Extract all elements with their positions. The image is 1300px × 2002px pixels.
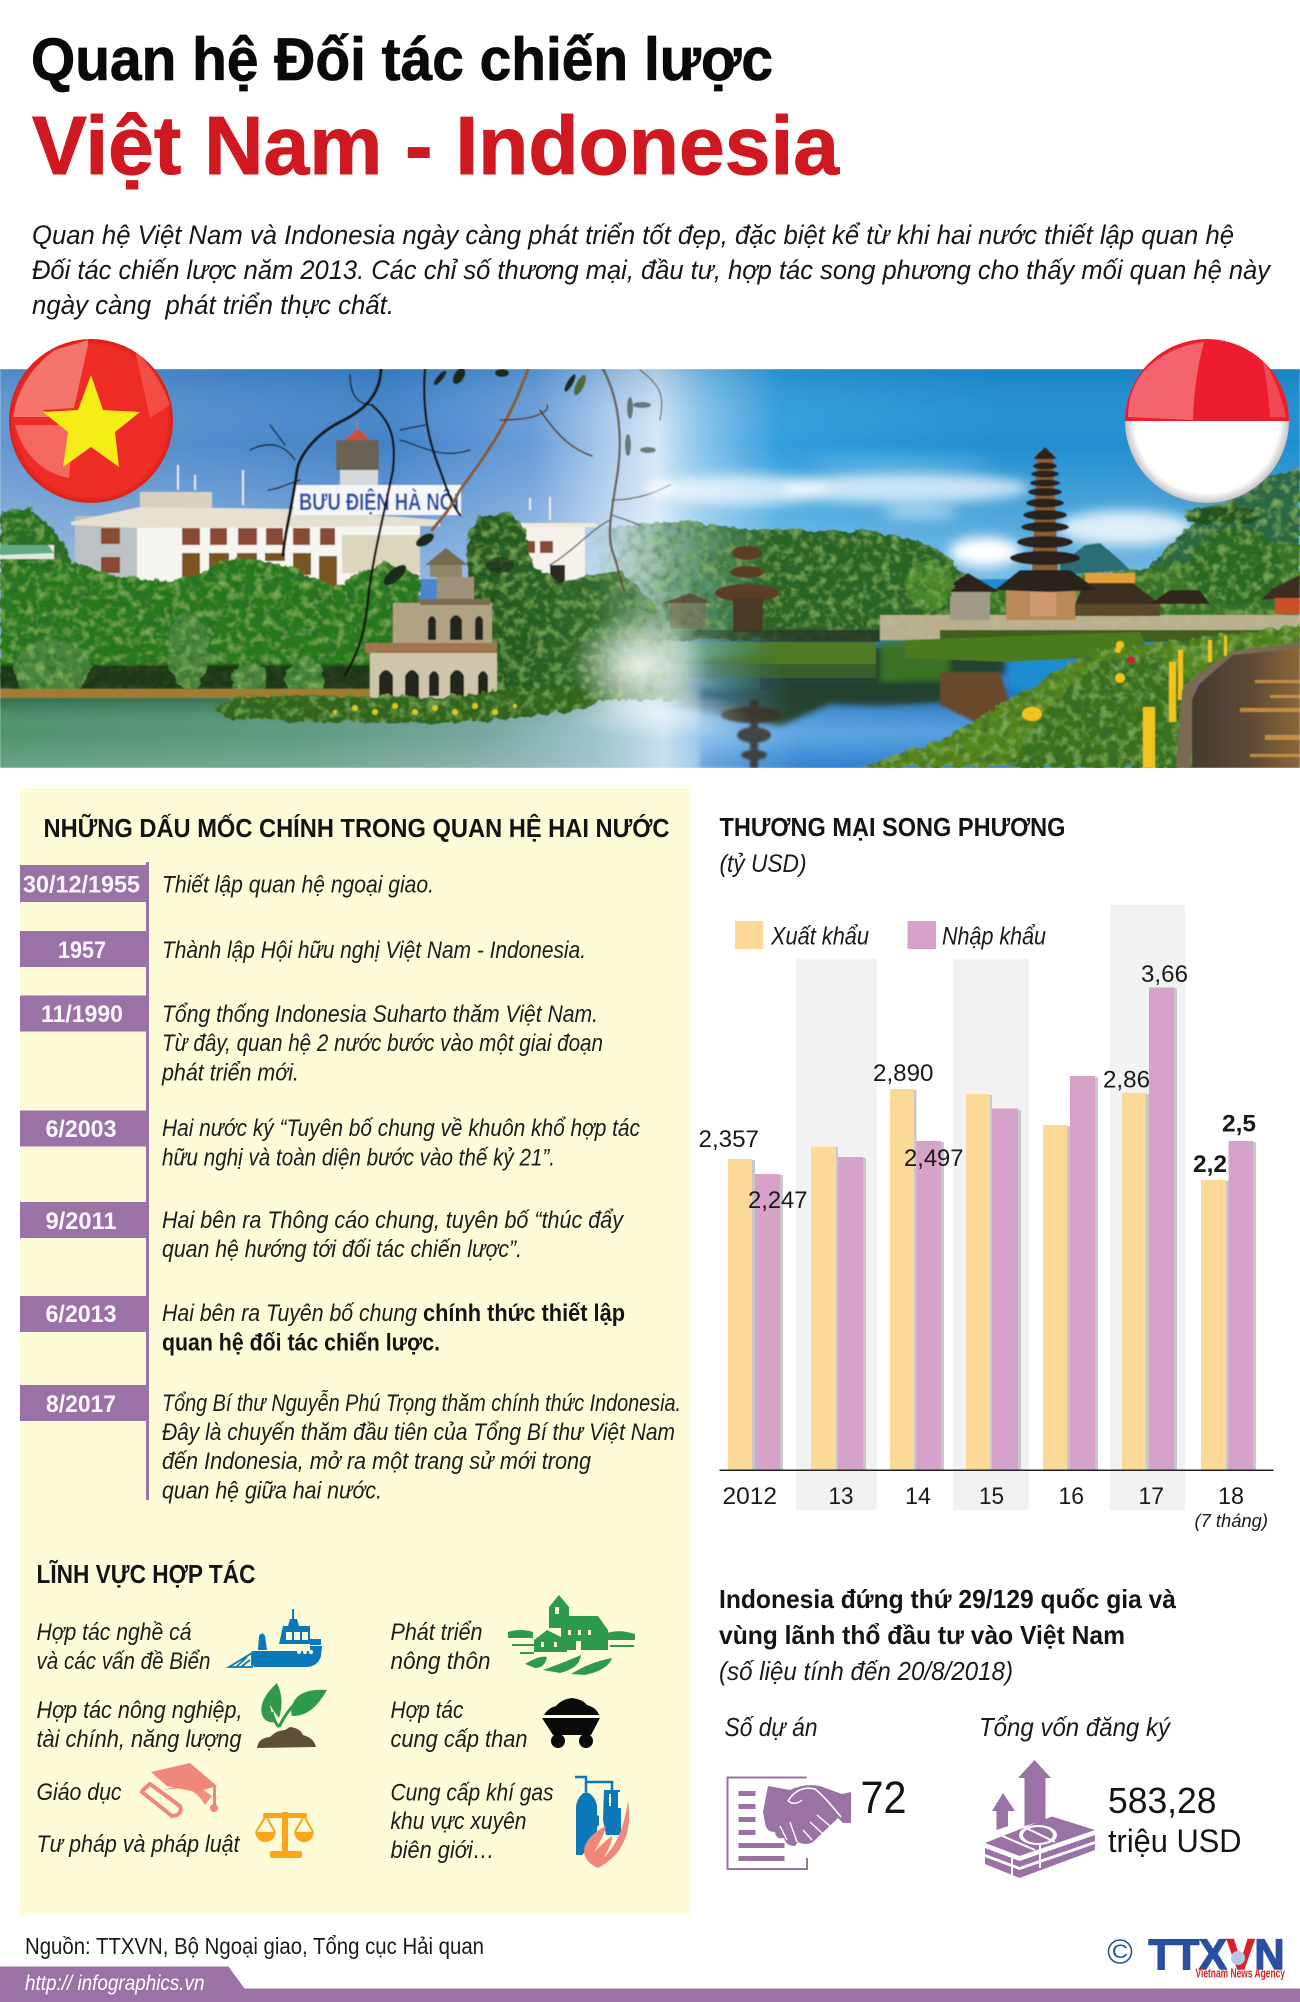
cooperation text: fisheries: Hợp tác nghề cá	[36, 1619, 192, 1646]
milestone 2017: đến Indonesia, mở ra một trang sử mới trong	[162, 1448, 592, 1475]
right trees	[906, 506, 1280, 610]
year labels: 17	[1138, 1483, 1164, 1510]
Bali temple left small	[663, 546, 779, 632]
icon: coal cart	[542, 1698, 600, 1748]
cooperation text: gas: biên giới…	[390, 1837, 494, 1864]
cooperation text: agriculture	[36, 1697, 242, 1753]
middle mist	[572, 613, 706, 710]
cooperation text: fisheries	[36, 1619, 210, 1675]
milestone 2017: Đây là chuyến thăm đầu tiên của Tổng Bí thư Việt Nam	[162, 1419, 675, 1446]
Turtle Tower	[365, 548, 497, 700]
milestone 2013: 6/2013	[46, 1301, 116, 1328]
milestone 2011: quan hệ hướng tới đối tác chiến lược”.	[162, 1236, 522, 1263]
label: registered capital: Tổng vốn đăng ký	[979, 1712, 1172, 1742]
investment note: (số liệu tính đến 20/8/2018)	[719, 1656, 1013, 1686]
cooperation text: rural: nông thôn	[390, 1648, 490, 1675]
milestone 1990: 11/1990	[41, 1001, 123, 1028]
bar shadows	[752, 988, 1256, 1470]
axis	[720, 1470, 1274, 1471]
cooperation text: justice: Tư pháp và pháp luật	[36, 1831, 241, 1858]
intro text: ngày càng phát triển thực chất.	[32, 290, 394, 320]
investment heading	[719, 1584, 1177, 1650]
cooperation text: agriculture: tài chính, năng lượng	[36, 1726, 242, 1753]
source note: Nguồn: TTXVN, Bộ Ngoại giao, Tổng cục Hải quan	[25, 1933, 484, 1959]
investment section	[719, 1584, 1242, 1878]
value labels: 2,5	[1222, 1110, 1256, 1138]
island	[215, 686, 600, 723]
capital amount: 583,28	[1108, 1780, 1216, 1821]
intro text	[32, 220, 1271, 320]
milestone 1957: 1957	[58, 937, 106, 964]
milestone 2003: 6/2003	[46, 1116, 116, 1143]
title line 2: Việt Nam - Indonesia	[32, 99, 840, 192]
number: 72 projects: 72	[860, 1772, 906, 1823]
year labels: 16	[1058, 1483, 1084, 1510]
milestone 2017: 8/2017	[46, 1391, 116, 1418]
milestone 1957: Thành lập Hội hữu nghị Việt Nam - Indonesia.	[162, 937, 586, 964]
milestone 2017	[20, 1385, 681, 1504]
year labels: 15	[979, 1483, 1004, 1510]
foreground bushes and flowers	[860, 625, 1300, 768]
flag: Vietnam	[9, 339, 173, 505]
cooperation text: gas: khu vực xuyên	[390, 1808, 526, 1835]
lake	[0, 690, 1010, 768]
post office sign	[293, 485, 461, 516]
cooperation text: coal: cung cấp than	[390, 1726, 528, 1753]
milestone 2011: 9/2011	[46, 1208, 116, 1235]
value labels: 2,890	[873, 1060, 934, 1087]
milestone 1955: 30/12/1955	[23, 872, 140, 898]
dark tree behind tower	[468, 513, 695, 700]
icon: scales	[255, 1812, 314, 1858]
branches	[250, 369, 470, 675]
chart: bilateral trade	[698, 812, 1274, 1531]
legend: Xuất khẩu	[770, 922, 869, 950]
cooperation text: education: Giáo dục	[36, 1779, 122, 1806]
cooperation text: fisheries: và các vấn đề Biển	[36, 1648, 210, 1675]
year labels: (7 tháng)	[1194, 1511, 1268, 1531]
label: number of projects: Số dự án	[724, 1712, 818, 1742]
milestone 2017: quan hệ giữa hai nước.	[162, 1478, 382, 1504]
value labels: 2,86	[1103, 1066, 1150, 1094]
milestone 1990: phát triển mới.	[161, 1060, 299, 1086]
milestone 2003: Hai nước ký “Tuyên bố chung về khuôn khổ hợp tác	[162, 1115, 640, 1142]
cooperation text: coal: Hợp tác	[390, 1697, 464, 1724]
post office sign: BƯU ĐIỆN HÀ NỘI	[299, 488, 459, 516]
milestone 2003: hữu nghị và toàn diện bước vào thế kỷ 21”.	[162, 1144, 555, 1172]
capital amount	[1108, 1780, 1242, 1859]
heading: milestones: NHỮNG DẤU MỐC CHÍNH TRONG QUAN HỆ HAI NƯỚC	[44, 813, 670, 843]
flag: Indonesia	[1125, 339, 1289, 505]
title	[31, 26, 840, 192]
milestone 1990	[20, 996, 603, 1086]
cooperation text: gas	[390, 1780, 554, 1864]
Bali grounds	[880, 615, 1300, 640]
milestone 1990: Tổng thống Indonesia Suharto thăm Việt Nam.	[162, 1001, 598, 1028]
value labels: 3,66	[1141, 961, 1188, 988]
year labels: 2012	[722, 1483, 777, 1510]
import bars	[755, 988, 1253, 1470]
milestone 1990: Từ đây, quan hệ 2 nước bước vào một giai đoạn	[162, 1030, 603, 1057]
investment heading: vùng lãnh thổ đầu tư vào Việt Nam	[719, 1620, 1125, 1650]
year labels: 18	[1218, 1483, 1244, 1510]
icon: village	[508, 1595, 635, 1675]
left hedges	[650, 630, 880, 642]
value labels: 2,497	[904, 1145, 964, 1172]
logo: TTXVN: TTXVN	[1148, 1931, 1284, 1979]
cooperation text: agriculture: Hợp tác nông nghiệp,	[36, 1697, 242, 1724]
highlight bands	[796, 905, 1185, 1510]
icon: graduation cap	[142, 1763, 218, 1816]
icon: money stack and arrows	[985, 1760, 1095, 1878]
milestone 2013	[20, 1296, 625, 1356]
milestone 2003	[20, 1110, 640, 1172]
milestone 1957	[20, 931, 586, 967]
logo: TTXVN: C	[1112, 1942, 1128, 1963]
milestone 2017: Tổng Bí thư Nguyễn Phú Trọng thăm chính thức Indonesia.	[162, 1389, 681, 1417]
milestone 2013: quan hệ đối tác chiến lược.	[162, 1330, 440, 1356]
milestone 2011	[20, 1202, 625, 1263]
cooperation text: coal	[390, 1697, 528, 1753]
milestone 1955: Thiết lập quan hệ ngoại giao.	[162, 872, 434, 898]
Bali temple main	[940, 447, 1300, 620]
year labels: 13	[828, 1483, 854, 1510]
chart unit: (tỷ USD)	[720, 850, 806, 878]
value labels: 2,2	[1193, 1151, 1227, 1178]
footer bar	[0, 1966, 1300, 2002]
legend: Nhập khẩu	[942, 922, 1046, 950]
capital amount: triệu USD	[1108, 1823, 1242, 1859]
milestone 1955	[20, 865, 434, 902]
cooperation text: rural: Phát triển	[390, 1619, 482, 1646]
timeline	[20, 862, 681, 1504]
milestone 2013: Hai bên ra Tuyên bố chung	[162, 1300, 418, 1327]
cooperation text: rural	[390, 1619, 490, 1675]
value labels	[698, 961, 1256, 1214]
chart heading: THƯƠNG MẠI SONG PHƯƠNG	[720, 812, 1066, 842]
icon: document and handshake	[726, 1776, 851, 1870]
export bars	[728, 1089, 1226, 1470]
intro text: Quan hệ Việt Nam và Indonesia ngày càng phát triển tốt đẹp, đặc biệt kể từ khi hai nước thiết lập quan hệ	[32, 220, 1234, 250]
value labels: 2,247	[748, 1187, 808, 1214]
heading: cooperation fields: LĨNH VỰC HỢP TÁC	[36, 1559, 256, 1589]
photo banner: Hanoi and Bali	[0, 366, 1300, 768]
cooperation text: gas: Cung cấp khí gas	[390, 1780, 554, 1806]
title line 1: Quan hệ Đối tác chiến lược	[31, 26, 773, 93]
reflections	[640, 638, 1005, 726]
Hanoi trees	[0, 508, 72, 575]
panel: milestones and cooperation	[20, 788, 690, 1914]
investment heading: Indonesia đứng thứ 29/129 quốc gia và	[719, 1584, 1177, 1614]
year labels: 14	[905, 1483, 931, 1510]
icon: gas pipes and flame	[575, 1777, 629, 1868]
path	[1176, 642, 1300, 768]
legend	[735, 921, 1046, 950]
website link: http:// infographics.vn	[25, 1972, 204, 1995]
value labels: 2,357	[698, 1126, 759, 1153]
Hanoi building	[71, 420, 597, 595]
icon: ship	[229, 1609, 322, 1667]
year labels	[722, 1483, 1268, 1531]
icon: plant	[257, 1683, 327, 1748]
clock tower	[336, 420, 379, 490]
milestone 2011: Hai bên ra Thông cáo chung, tuyên bố “thúc đẩy	[162, 1207, 625, 1234]
milestone 2013: chính thức thiết lập	[423, 1300, 625, 1327]
